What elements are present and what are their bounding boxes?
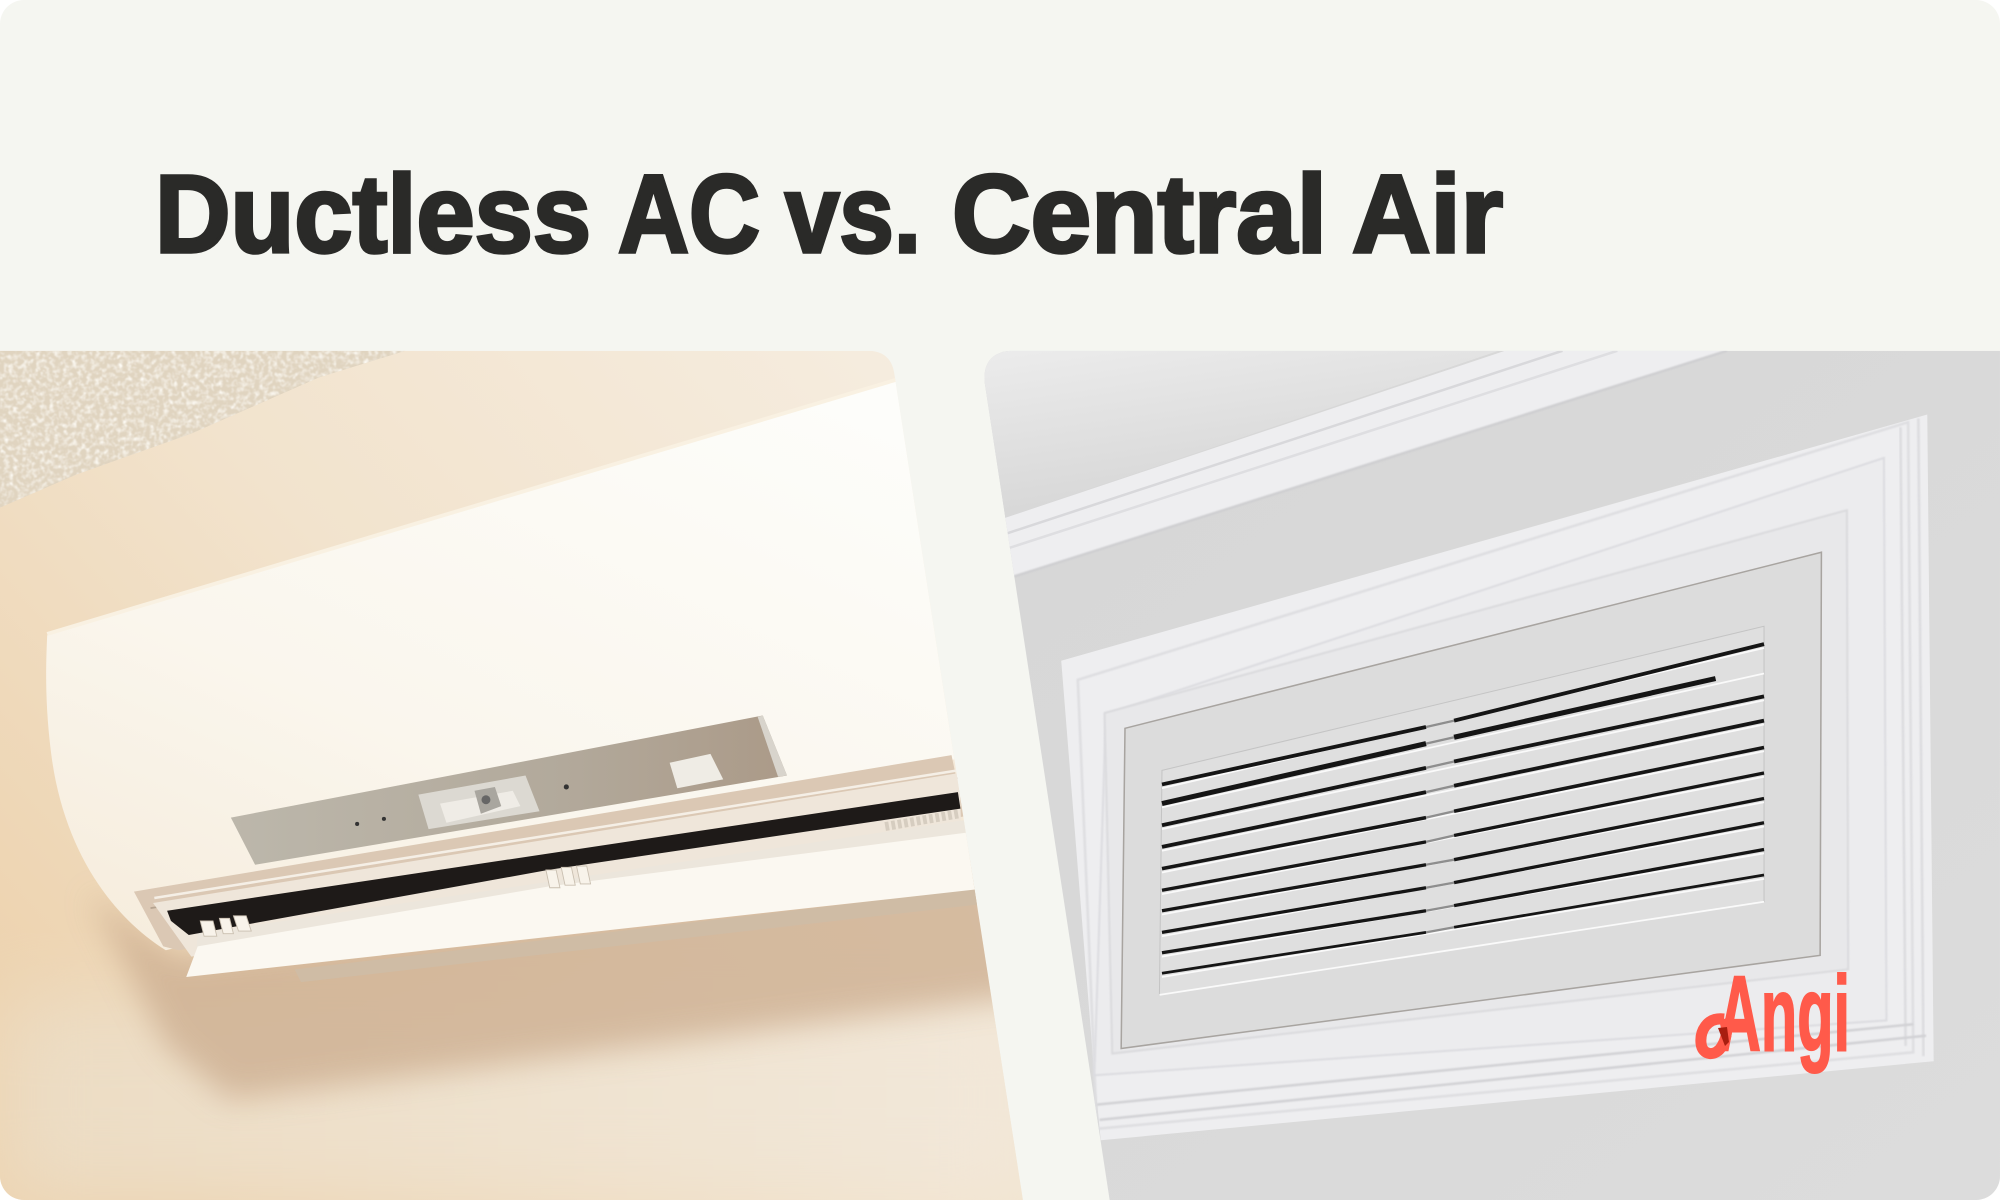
title: Air bbox=[1352, 153, 1503, 276]
title: AC bbox=[618, 153, 760, 276]
title: Ductless bbox=[155, 153, 591, 276]
AC control panel bbox=[231, 716, 787, 865]
AC trim strip bbox=[134, 755, 964, 957]
AC louvre flap bbox=[186, 814, 980, 982]
Angi logo: Angi bbox=[1718, 954, 1850, 1074]
ceiling bbox=[984, 351, 1497, 460]
wall shadow beneath AC bbox=[89, 867, 1033, 1099]
Angi logo bbox=[1701, 954, 1850, 1074]
vent louvres bbox=[1159, 626, 1764, 995]
title: Central bbox=[952, 153, 1327, 276]
title: vs. bbox=[785, 153, 921, 276]
AC unit body bbox=[46, 379, 982, 950]
photo panel: ductless wall-mounted AC unit bbox=[0, 351, 1033, 1200]
vent faceplate bbox=[1121, 552, 1821, 1048]
ceiling texture bbox=[0, 351, 406, 508]
moulded wall frame bbox=[1061, 415, 1934, 1140]
crown moulding bbox=[1005, 351, 1727, 577]
photo panel: central air return vent bbox=[969, 351, 2000, 1200]
AC air slot bbox=[167, 792, 960, 935]
